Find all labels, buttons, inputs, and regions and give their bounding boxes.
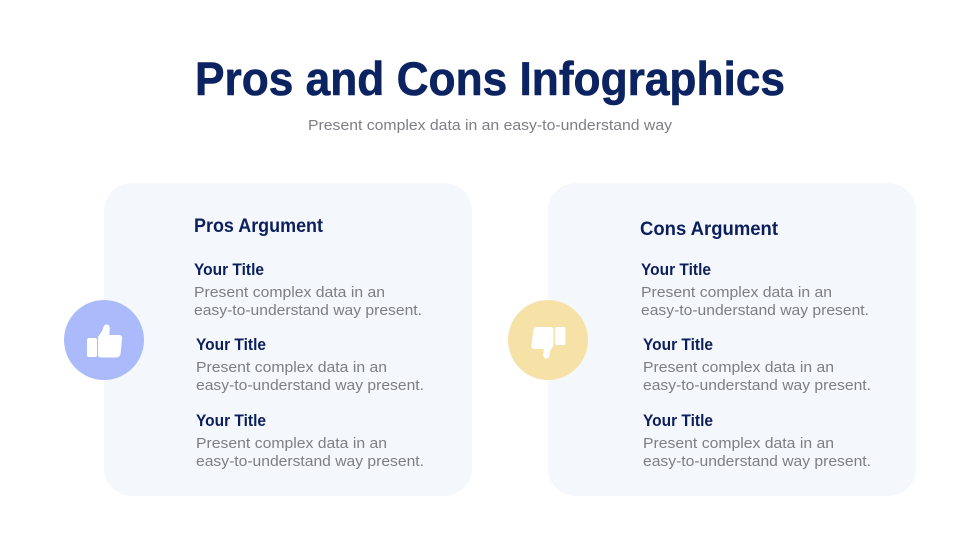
cons item 3: easy-to-understand way present. <box>643 453 871 470</box>
cons item 3 <box>643 412 871 470</box>
pros item 2: easy-to-understand way present. <box>196 377 424 394</box>
cons item 2: Your Title <box>643 336 713 354</box>
title: Pros and Cons Infographics <box>195 52 785 105</box>
panel background: pros <box>104 183 472 496</box>
icon: thumbs down <box>508 300 588 380</box>
cons item 3: Present complex data in an <box>643 435 834 452</box>
cons item 1: Present complex data in an <box>641 284 832 301</box>
cons item 1: easy-to-understand way present. <box>641 302 869 319</box>
panel: cons <box>548 183 916 496</box>
pros item 1: Present complex data in an <box>194 284 385 301</box>
cons item 2: easy-to-understand way present. <box>643 377 871 394</box>
pros item 1: easy-to-understand way present. <box>194 302 422 319</box>
heading: pros argument: Pros Argument <box>194 216 324 237</box>
cons item 3: Your Title <box>643 412 713 430</box>
pros item 3: Present complex data in an <box>196 435 387 452</box>
panel: pros <box>104 183 472 496</box>
cons item 2: Present complex data in an <box>643 359 834 376</box>
pros item 1 <box>194 261 422 319</box>
cons item 1: Your Title <box>641 261 711 279</box>
pros item 3: easy-to-understand way present. <box>196 453 424 470</box>
cons item 2 <box>643 336 871 394</box>
pros item 2: Present complex data in an <box>196 359 387 376</box>
pros item 2: Your Title <box>196 336 266 354</box>
pros item 2 <box>196 336 424 394</box>
cons item 1 <box>641 261 869 319</box>
heading: cons argument: Cons Argument <box>640 219 779 240</box>
pros item 3 <box>196 412 424 470</box>
pros item 1: Your Title <box>194 261 264 279</box>
icon: thumbs up <box>64 300 144 380</box>
pros item 3: Your Title <box>196 412 266 430</box>
subtitle: Present complex data in an easy-to-understand way <box>308 117 673 134</box>
panel background: cons <box>548 183 916 496</box>
